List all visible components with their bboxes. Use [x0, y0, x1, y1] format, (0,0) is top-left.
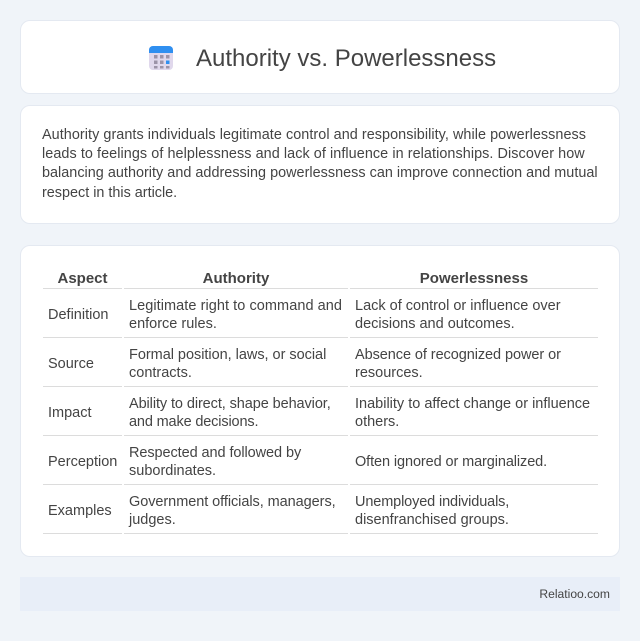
- row: source: Absence of recognized power or: [355, 347, 561, 363]
- row: definition: [43, 298, 598, 338]
- icon: calendar: [149, 46, 173, 70]
- panel: comparison table: [20, 245, 620, 557]
- text block: introduction: leads to feelings of helplessness and lack of influence in relationships. Discover how: [42, 146, 585, 162]
- row: perception: Often ignored or marginalized.: [355, 454, 547, 470]
- text block: introduction: Authority grants individuals legitimate control and responsibility, while powerlessness: [42, 127, 586, 143]
- row: impact: and make decisions.: [129, 414, 258, 430]
- table header: Aspect: [57, 270, 108, 287]
- row: definition: enforce rules.: [129, 316, 217, 332]
- row: perception: [43, 445, 598, 485]
- table header: Powerlessness: [420, 270, 528, 287]
- row: examples: Unemployed individuals,: [355, 494, 509, 510]
- table: comparison: [43, 270, 598, 534]
- row: examples: Examples: [48, 503, 112, 519]
- row: perception: subordinates.: [129, 463, 216, 479]
- row: definition: decisions and outcomes.: [355, 316, 515, 332]
- text block: introduction: [42, 127, 598, 201]
- row: impact: Ability to direct, shape behavior,: [129, 396, 331, 412]
- footer bar: [20, 577, 620, 611]
- row: definition: Legitimate right to command and: [129, 298, 342, 314]
- row: examples: Government officials, managers,: [129, 494, 336, 510]
- row: examples: judges.: [129, 512, 176, 528]
- row: source: Formal position, laws, or social: [129, 347, 326, 363]
- row: perception: Respected and followed by: [129, 445, 301, 461]
- footer text: Relatioo.com: [539, 587, 610, 601]
- title: Authority vs. Powerlessness: [196, 45, 496, 72]
- row: source: Source: [48, 356, 94, 372]
- row: source: resources.: [355, 365, 423, 381]
- panel: introduction: [20, 105, 620, 224]
- row: impact: others.: [355, 414, 399, 430]
- row: examples: [43, 494, 598, 534]
- text block: introduction: balancing authority and addressing powerlessness can improve connection and mutual: [42, 165, 598, 181]
- panel: title card: [20, 20, 620, 94]
- row: perception: Perception: [48, 454, 117, 470]
- table header: Authority: [203, 270, 269, 287]
- table header: [43, 270, 598, 289]
- row: source: contracts.: [129, 365, 192, 381]
- row: examples: disenfranchised groups.: [355, 512, 509, 528]
- row: definition: Lack of control or influence over: [355, 298, 561, 314]
- text block: introduction: respect in this article.: [42, 185, 177, 201]
- row: impact: Impact: [48, 405, 92, 421]
- row: definition: Definition: [48, 307, 108, 323]
- row: impact: [43, 396, 598, 436]
- row: impact: Inability to affect change or influence: [355, 396, 590, 412]
- row: source: [43, 347, 598, 387]
